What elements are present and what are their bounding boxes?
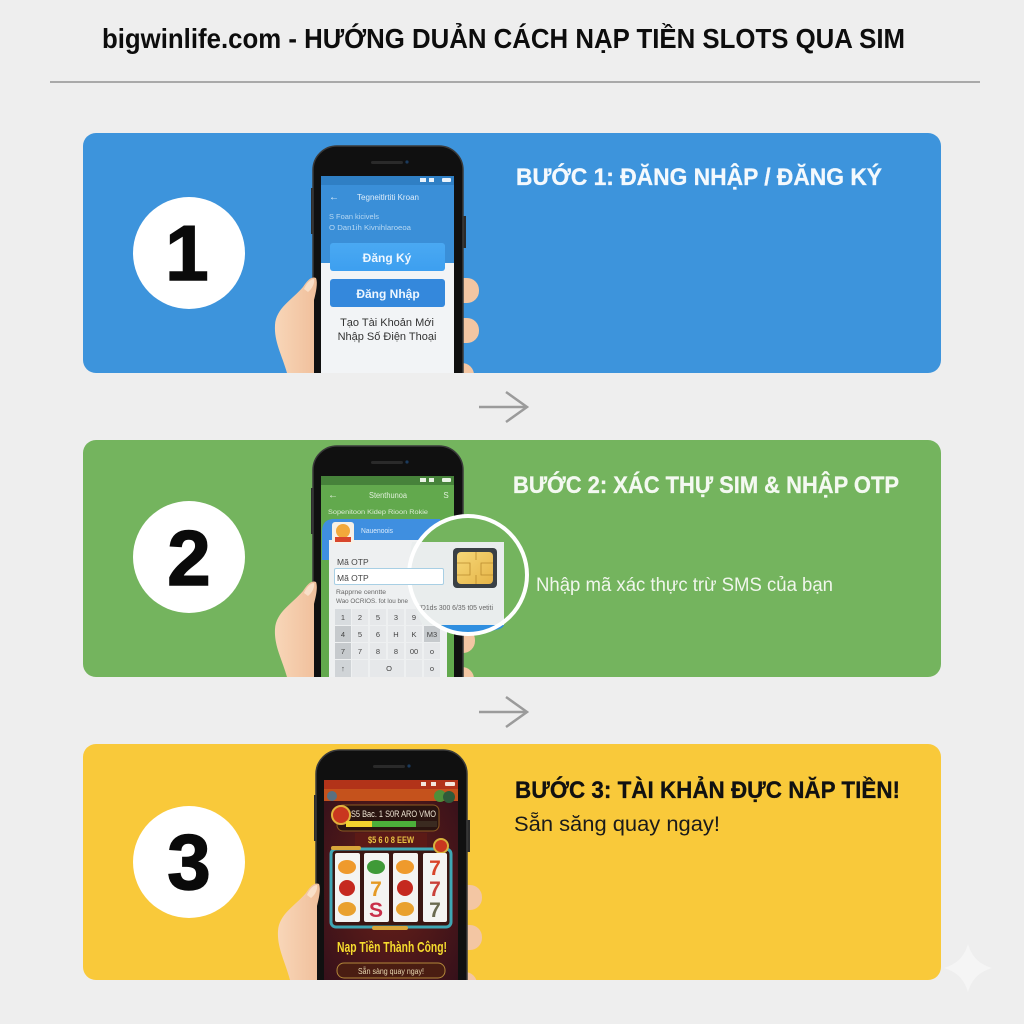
phone: OTP screen: S: [443, 491, 449, 500]
title: bigwinlife.com - HƯỚNG DUẢN CÁCH NẠP TIỀN SLOTS QUA SIM: [102, 22, 905, 54]
step 1 heading: BƯỚC 1: ĐĂNG NHẬP / ĐĂNG KÝ: [516, 163, 882, 191]
spin button: Sẵn sàng quay ngay!: [358, 967, 424, 976]
phone: login screen: Tạo Tài Khoản Mới: [340, 317, 434, 329]
phone: slot game screen: $5 6 0 8 EEW: [368, 835, 414, 845]
slot machine: S: [369, 899, 383, 922]
OTP input field: Mã OTP: [337, 573, 369, 583]
keypad: 4: [341, 630, 345, 639]
slot machine: [331, 839, 451, 930]
OTP card: Wao OCRIOS. fot lou bne: [336, 598, 408, 605]
phone: login screen: Nhập Số Điện Thoại: [338, 331, 436, 343]
phone: OTP screen: Nauenoois: [361, 528, 393, 535]
SIM chip: [453, 548, 497, 588]
keypad: o: [430, 664, 434, 673]
hand with thumb: [275, 278, 317, 373]
spin button: [337, 963, 445, 978]
keypad: 5: [358, 630, 362, 639]
button: login: Đăng Nhập: [356, 287, 420, 301]
keypad: ↑: [341, 664, 345, 673]
phone: OTP screen: Sopenitoon Kidep Rioon Rokie: [328, 509, 428, 516]
sparkle watermark: [944, 944, 992, 992]
panel: step 1: [83, 133, 941, 373]
button: login: [330, 279, 445, 307]
number badge 2: 2: [167, 514, 211, 602]
keypad: 9: [412, 613, 416, 622]
phone: login screen: O Dan1ih Kivnihlaroeoa: [329, 225, 411, 232]
slot machine: 7: [429, 899, 441, 922]
step 2 heading: BƯỚC 2: XÁC THỰ SIM & NHẬP OTP: [513, 471, 899, 499]
OTP input field: [334, 568, 444, 584]
number badge 3: 3: [167, 818, 211, 906]
arrow: step 1 to 2: [479, 392, 527, 422]
magnifier with SIM: [334, 516, 527, 634]
keypad: 2: [358, 613, 362, 622]
keypad: K: [411, 630, 417, 639]
OTP card: Mã OTP: [337, 557, 369, 567]
OTP card: [329, 540, 447, 680]
keypad: [335, 609, 440, 677]
keypad: 8: [376, 647, 380, 656]
phone: login screen: S Foan kicivels: [329, 214, 380, 221]
number badge 1: [133, 197, 245, 309]
keypad: 1: [341, 613, 345, 622]
app avatar: [332, 522, 354, 544]
number badge 2: [133, 501, 245, 613]
magnifier with SIM: ID1ds 300 6/35 t05 vetiti: [419, 605, 493, 612]
keypad: 5: [376, 613, 380, 622]
keypad: O: [386, 664, 392, 673]
game banner: S5 Bac. 1 S0R ARO VMO: [351, 809, 436, 819]
slot machine: 7: [429, 878, 441, 901]
panel: step 3: [83, 744, 941, 980]
success message: Nạp Tiền Thành Công!: [337, 939, 447, 956]
phone: OTP screen: [274, 445, 475, 677]
login screen white area: [321, 263, 454, 376]
keypad: 00: [410, 647, 418, 656]
arrow: step 2 to 3: [479, 697, 527, 727]
phone: slot game screen: [278, 749, 482, 980]
slot machine: 7: [429, 857, 441, 880]
panel: step 2: [83, 440, 941, 677]
game banner: [332, 805, 439, 831]
OTP card blue header: [322, 519, 440, 560]
keypad: 8: [394, 647, 398, 656]
button: register: [330, 243, 445, 271]
button: register: Đăng Ký: [363, 251, 412, 265]
keypad: o: [430, 647, 434, 656]
phone: login screen: [274, 145, 479, 373]
phone: login screen: Tegneitlrtiti Kroan: [357, 193, 419, 202]
phone: OTP screen: Stenthunoa: [369, 491, 408, 500]
slot machine: 7: [370, 878, 382, 901]
number badge 3: [133, 806, 245, 918]
keypad: 7: [358, 647, 362, 656]
number badge 1: 1: [165, 209, 209, 297]
phone: login screen: ←: [329, 192, 339, 203]
OTP card: Rapprne cenntte: [336, 589, 386, 596]
step 2 description: Nhập mã xác thực trừ SMS của bạn: [536, 575, 833, 596]
hand with thumb: [278, 884, 320, 980]
step 3 heading: BƯỚC 3: TÀI KHẢN ĐỰC NĂP TIỀN!: [515, 775, 900, 804]
keypad: H: [393, 630, 399, 639]
hand with thumb: [275, 582, 317, 677]
phone: OTP screen: ←: [328, 490, 338, 501]
keypad: 3: [394, 613, 398, 622]
keypad: 6: [376, 630, 380, 639]
keypad: M3: [427, 630, 437, 639]
keypad: 7: [341, 647, 345, 656]
step 3 description: Sẵn săng quay ngay!: [514, 813, 720, 836]
